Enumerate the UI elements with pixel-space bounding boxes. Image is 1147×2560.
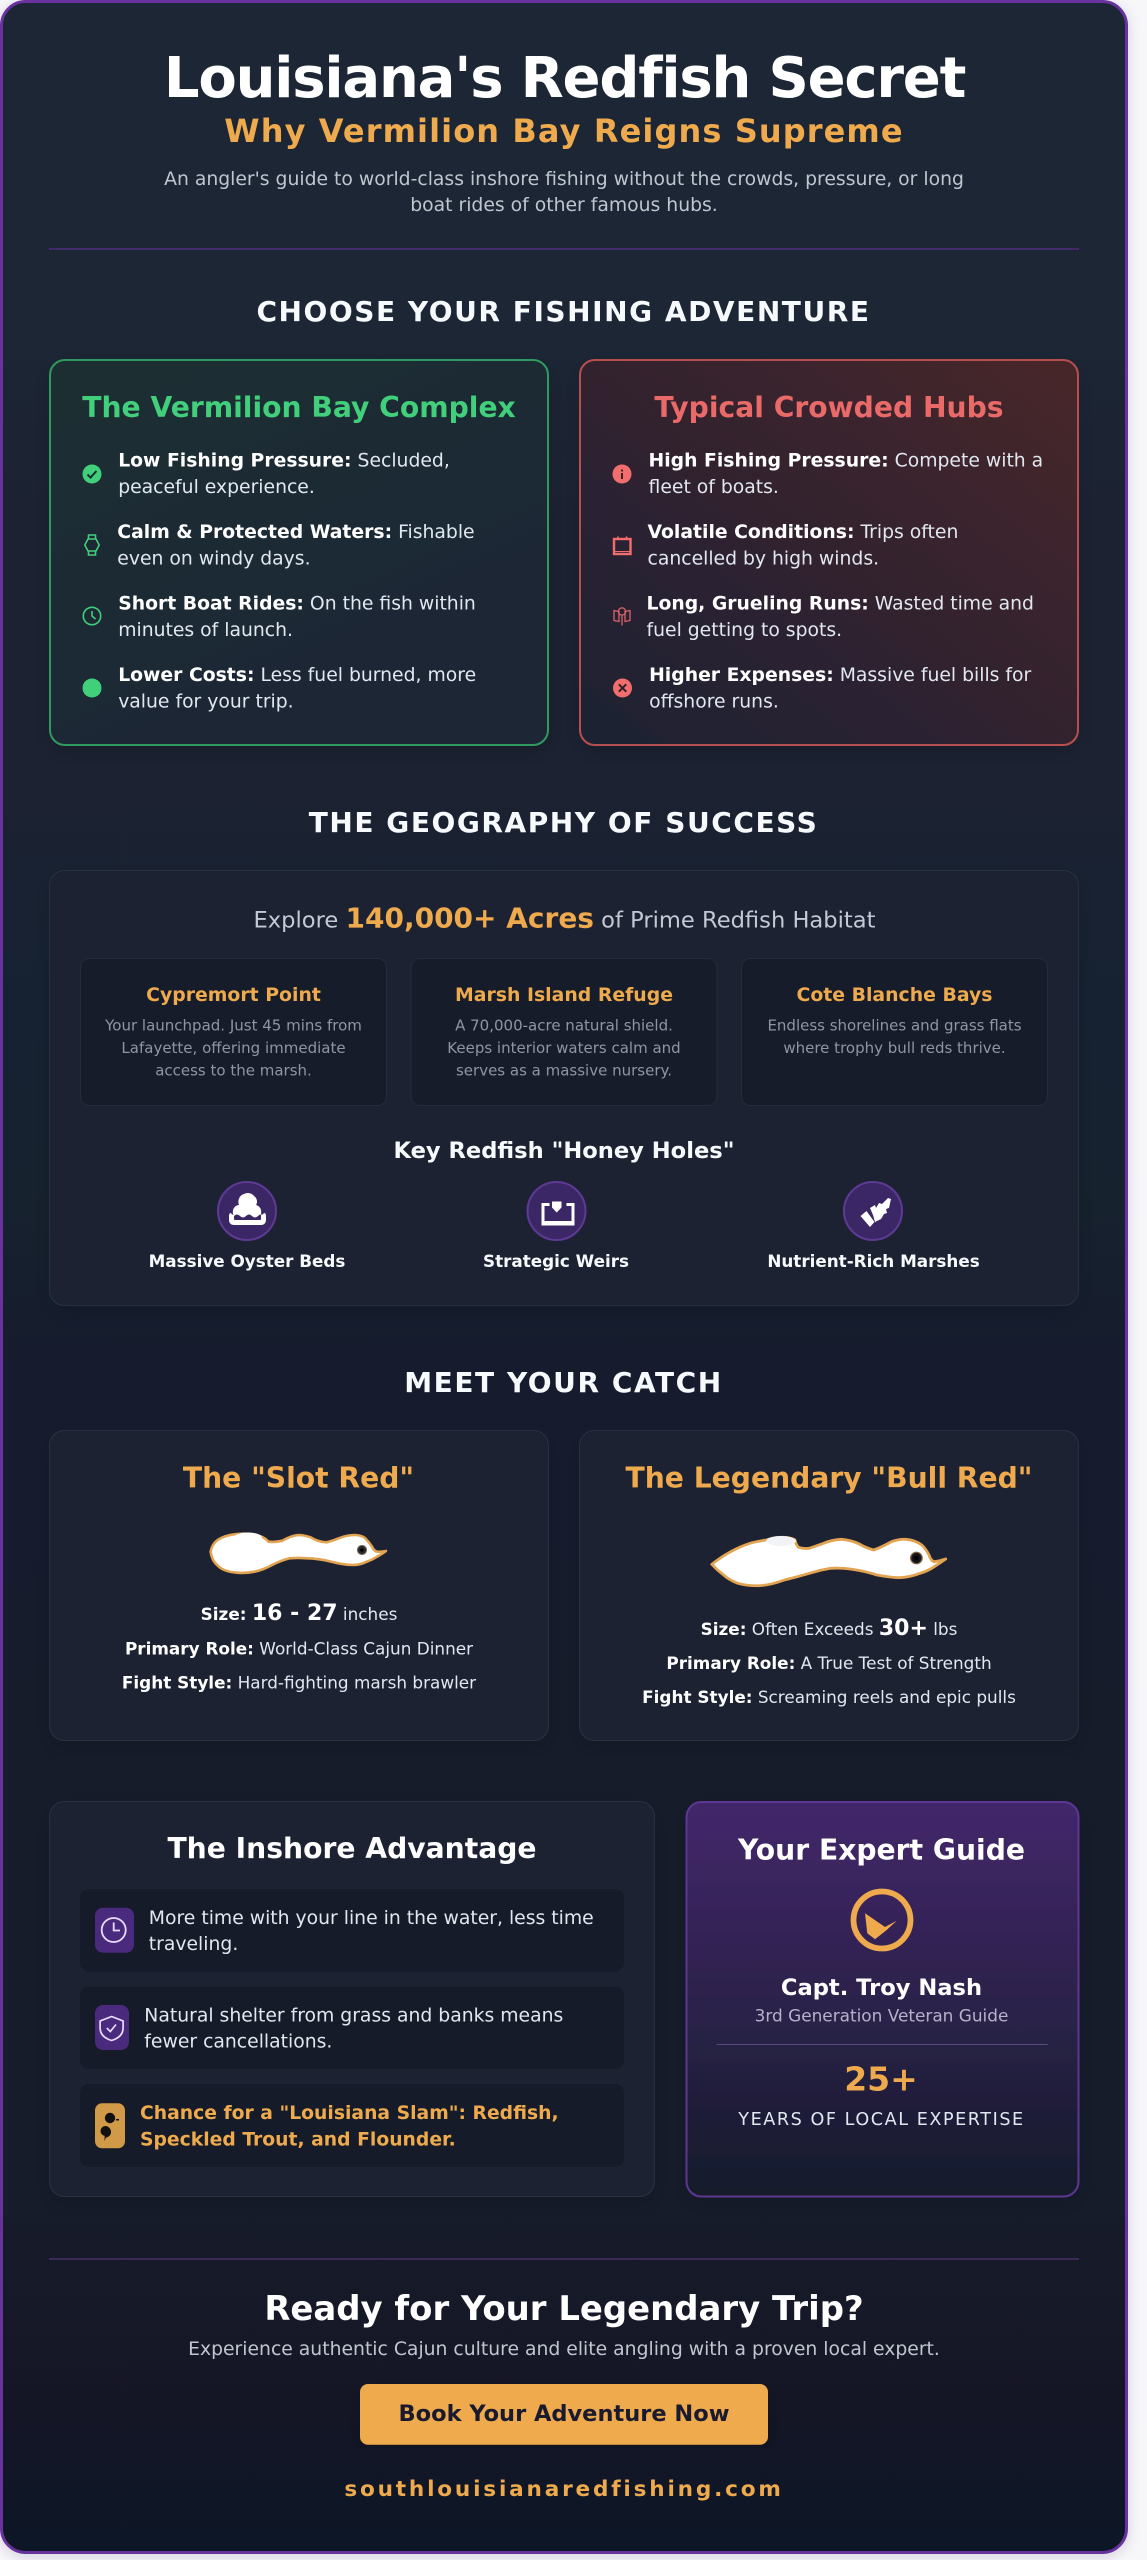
panel: the inshore advantage	[50, 1802, 654, 2196]
advantage: louisiana slam: Speckled Trout, and Flounder.	[140, 2129, 456, 2150]
advantage: more time	[80, 1889, 624, 1972]
icon: slam badge	[95, 2103, 125, 2148]
stat: years	[737, 2060, 1025, 2130]
card: cypremort point: Your launchpad. Just 45 mins from	[104, 1017, 362, 1035]
button: book your adventure now: Book Your Adventure Now	[398, 2401, 730, 2427]
item: lower costs	[82, 665, 476, 712]
item: higher expenses	[613, 665, 1032, 712]
stats: Primary Role: World-Class Cajun Dinner	[125, 1638, 473, 1658]
card: marsh island refuge	[411, 958, 717, 1106]
advantage: natural shelter: fewer cancellations.	[144, 2032, 332, 2053]
icon: calendar box	[614, 536, 630, 554]
card: marsh island refuge: A 70,000-acre natural shield.	[455, 1017, 673, 1035]
card: cote blanche bays	[742, 958, 1048, 1106]
icon: x circle	[613, 678, 632, 698]
item: short boat rides: Short Boat Rides: On the fish within	[118, 594, 476, 615]
advantage: louisiana slam: Chance for a "Louisiana Slam": Redfish,	[140, 2103, 559, 2124]
stats: Fight Style: Hard-fighting marsh brawler	[122, 1672, 476, 1692]
item: short boat rides: minutes of launch.	[118, 620, 293, 641]
item: calm and protected waters	[85, 522, 475, 570]
advantage: more time: traveling.	[149, 1934, 238, 1955]
icon: watch	[85, 535, 99, 555]
heading: The Inshore Advantage	[167, 1832, 537, 1865]
item: higher expenses: Higher Expenses: Massive fuel bills for	[649, 665, 1032, 686]
footer text: Experience authentic Cajun culture and elite angling with a proven local expert.	[188, 2339, 940, 2360]
item: high fishing pressure	[612, 451, 1043, 498]
item: low fishing pressure: Low Fishing Pressure: Secluded,	[118, 451, 450, 472]
button: book your adventure now	[360, 2384, 768, 2445]
card: cote blanche bays: Cote Blanche Bays	[796, 985, 993, 1006]
heading: meet your catch: MEET YOUR CATCH	[404, 1366, 723, 1399]
card: marsh island refuge: Marsh Island Refuge	[455, 985, 673, 1006]
honey hole: oyster beds: Massive Oyster Beds	[149, 1251, 345, 1271]
advantage: louisiana slam	[80, 2084, 624, 2167]
item: long grueling runs	[614, 594, 1034, 641]
item: calm and protected waters: Calm & Protected Waters: Fishable	[117, 522, 475, 543]
honey hole: marshes: Nutrient-Rich Marshes	[767, 1251, 980, 1271]
item: lower costs: Lower Costs: Less fuel burned, more	[118, 665, 476, 686]
card: cote blanche bays: Endless shorelines and grass flats	[767, 1017, 1022, 1035]
captain name: Capt. Troy Nash	[781, 1975, 982, 2001]
item: long grueling runs: Long, Grueling Runs: Wasted time and	[646, 594, 1034, 615]
icon: check circle	[82, 464, 102, 484]
panel: typical crowded hubs	[580, 360, 1078, 745]
icon: map pin	[614, 608, 630, 626]
footer heading: Ready for Your Legendary Trip?	[264, 2289, 864, 2328]
honey hole: oyster beds	[149, 1182, 345, 1271]
item: calm and protected waters: even on windy days.	[117, 548, 311, 570]
advantage: natural shelter	[80, 1987, 624, 2069]
heading: The "Slot Red"	[183, 1462, 414, 1495]
honey hole: marshes	[767, 1182, 980, 1271]
item: volatile conditions	[614, 522, 958, 570]
heading: the geography of success: THE GEOGRAPHY OF SUCCESS	[309, 806, 818, 839]
subtitle: Why Vermilion Bay Reigns Supreme	[224, 112, 904, 150]
panel: the vermilion bay complex	[50, 360, 548, 745]
item: higher expenses: offshore runs.	[649, 692, 779, 712]
card: cote blanche bays: where trophy bull reds thrive.	[783, 1039, 1006, 1057]
panel: your expert guide	[686, 1802, 1078, 2196]
panel: geography	[50, 870, 1078, 1306]
subheading: honey holes: Key Redfish "Honey Holes"	[394, 1138, 734, 1164]
icon: clock badge	[95, 1908, 134, 1953]
icon: dot	[82, 678, 102, 698]
intro text: An angler's guide to world-class inshore fishing without the crowds, pressure, or long	[164, 169, 964, 190]
stats: Fight Style: Screaming reels and epic pulls	[642, 1687, 1016, 1707]
card: marsh island refuge: Keeps interior waters calm and	[447, 1039, 681, 1057]
captain role: 3rd Generation Veteran Guide	[755, 2006, 1008, 2026]
header: boat rides of other famous hubs.	[410, 195, 718, 216]
title: Louisiana's Redfish Secret	[164, 46, 966, 111]
icon: clock	[83, 607, 101, 625]
icon: captain badge	[854, 1892, 910, 1948]
card: marsh island refuge: serves as a massive nursery.	[456, 1062, 672, 1080]
heading: Your Expert Guide	[737, 1833, 1025, 1866]
card: cypremort point: Lafayette, offering immediate	[121, 1039, 346, 1057]
footer call to action	[188, 2289, 940, 2502]
acreage headline: Explore 140,000+ Acres of Prime Redfish Habitat	[254, 902, 876, 935]
item: volatile conditions: Volatile Conditions: Trips often	[648, 522, 958, 543]
item: high fishing pressure: High Fishing Pressure: Compete with a	[648, 451, 1043, 472]
advantage: natural shelter: Natural shelter from grass and banks means	[144, 2006, 563, 2027]
item: low fishing pressure: peaceful experience.	[118, 477, 315, 498]
heading: The Vermilion Bay Complex	[82, 391, 516, 424]
item: short boat rides	[83, 594, 476, 641]
advantage: more time: More time with your line in the water, less time	[149, 1908, 594, 1929]
panel: bull red	[580, 1430, 1078, 1740]
icon: marsh	[844, 1182, 902, 1240]
icon: shield badge	[95, 2005, 129, 2050]
card: cypremort point	[80, 958, 386, 1106]
stat: years: 25+	[844, 2060, 918, 2099]
icon: weir	[528, 1182, 586, 1240]
card: cypremort point: Cypremort Point	[146, 985, 321, 1006]
panel: slot red	[50, 1430, 548, 1740]
card: cypremort point: access to the marsh.	[155, 1062, 312, 1080]
stats: Primary Role: A True Test of Strength	[666, 1653, 992, 1673]
item: high fishing pressure: fleet of boats.	[648, 477, 779, 498]
icon: bull red fish	[712, 1536, 946, 1586]
heading: Typical Crowded Hubs	[654, 391, 1004, 424]
icon: oyster	[218, 1182, 276, 1240]
honey hole: weirs: Strategic Weirs	[483, 1251, 629, 1271]
header	[164, 46, 966, 216]
icon: info circle	[612, 464, 632, 484]
item: lower costs: value for your trip.	[118, 692, 294, 712]
heading: choose your fishing adventure: CHOOSE YOUR FISHING ADVENTURE	[256, 295, 871, 328]
item: volatile conditions: cancelled by high winds.	[648, 548, 879, 570]
website url: southlouisianaredfishing.com	[344, 2477, 784, 2502]
heading: The Legendary "Bull Red"	[625, 1462, 1033, 1495]
item: long grueling runs: fuel getting to spots.	[646, 620, 842, 641]
icon: slot red fish	[211, 1532, 386, 1573]
stats: Size: 16 - 27 inches	[201, 1601, 397, 1626]
stats	[122, 1601, 476, 1692]
honey hole: weirs	[483, 1182, 629, 1271]
stat: years: YEARS OF LOCAL EXPERTISE	[737, 2110, 1025, 2130]
stats: Size: Often Exceeds 30+ lbs	[701, 1616, 957, 1641]
stats	[642, 1616, 1016, 1707]
item: low fishing pressure	[82, 451, 450, 498]
